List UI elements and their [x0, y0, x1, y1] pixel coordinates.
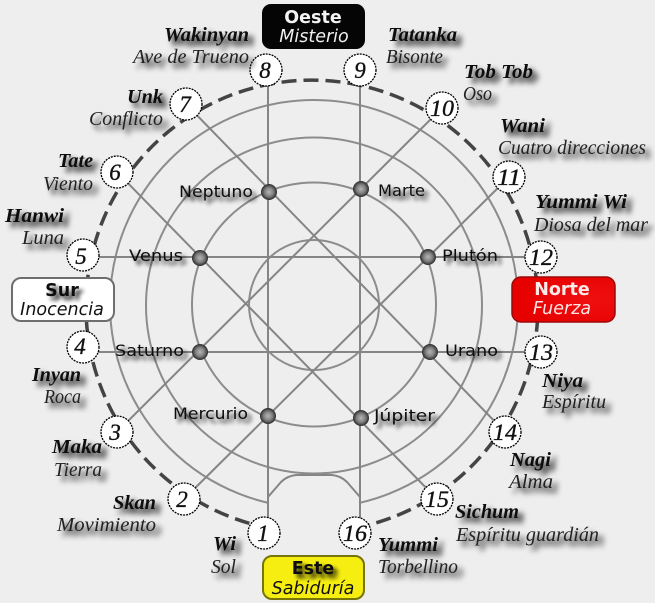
label: Nagi / Alma: [507, 449, 553, 493]
label: Wani / Cuatro direcciones: Cuatro direcciones: [498, 137, 646, 159]
direction box: Sur / Inocencia: [12, 278, 114, 321]
planet: Mercurio: Mercurio: [173, 404, 248, 423]
label: Tatanka / Bisonte: Bisonte: [386, 46, 443, 68]
planet: Saturno: [115, 341, 208, 360]
label: Unk / Conflicto: [89, 86, 163, 130]
planet: Saturno: Saturno: [115, 341, 184, 360]
label: Skan / Movimiento: [56, 492, 156, 536]
label: Wani / Cuatro direcciones: Wani: [500, 115, 545, 137]
number 16: [339, 517, 371, 549]
planet: Mercurio: [173, 404, 276, 424]
label: Yummi / Torbellino: [378, 534, 458, 578]
number 10: [426, 92, 458, 124]
star chords connecting numbered points: [83, 70, 541, 533]
label: Tatanka / Bisonte: Tatanka: [388, 24, 457, 46]
planet: Marte: [353, 181, 425, 200]
number 11: 11: [497, 165, 521, 190]
planet: Urano: [422, 341, 498, 360]
label: Tate / Viento: Tate: [58, 150, 93, 172]
number 2: [168, 483, 200, 515]
direction box: Este / Sabiduría: Este: [292, 559, 334, 579]
planet: Venus: Venus: [129, 246, 183, 265]
number 1: [248, 517, 280, 549]
label: Nagi / Alma: Alma: [507, 471, 553, 493]
number 6: [101, 156, 133, 188]
label: Inyan / Roca: [31, 364, 81, 408]
number 14: 14: [493, 420, 517, 445]
label: Yummi / Torbellino: Yummi: [378, 534, 438, 556]
direction box: Norte / Fuerza: Fuerza: [533, 299, 591, 319]
label: Skan / Movimiento: Movimiento: [56, 514, 156, 536]
number 6: 6: [109, 160, 121, 185]
label: Yummi Wi / Diosa del mar: Diosa del mar: [533, 214, 648, 236]
label: Sichum / Espíritu guardián: Sichum: [455, 501, 519, 523]
number 4: 4: [74, 334, 86, 359]
number 13: [525, 336, 557, 368]
number 5: [67, 239, 99, 271]
number 13: 13: [529, 340, 553, 365]
number 15: 15: [425, 487, 449, 512]
number 12: 12: [529, 245, 553, 270]
label: Yummi Wi / Diosa del mar: Yummi Wi: [535, 191, 627, 213]
label: Tatanka / Bisonte: [386, 24, 457, 68]
direction box: Oeste / Misterio: Misterio: [279, 27, 349, 47]
planet: Marte: Marte: [378, 181, 425, 200]
direction box: Sur / Inocencia: Sur: [45, 281, 79, 301]
number 3: 3: [108, 420, 121, 445]
label: Sichum / Espíritu guardián: Espíritu guardián: [455, 524, 599, 546]
number 16: 16: [343, 521, 368, 546]
number 7: 7: [179, 92, 192, 117]
planet: Plutón: [420, 246, 498, 265]
label: Unk / Conflicto: Unk: [127, 86, 163, 108]
planet: Venus: [129, 246, 208, 266]
direction box: Oeste / Misterio: [262, 4, 365, 49]
number 4: [67, 331, 99, 363]
label: Inyan / Roca: Roca: [43, 386, 81, 408]
label: Hanwi / Luna: Luna: [21, 227, 64, 249]
label: Tate / Viento: Viento: [43, 173, 93, 195]
number 9: [344, 54, 376, 86]
number 8: 8: [259, 58, 271, 83]
number 5: 5: [75, 244, 87, 269]
label: Wi / Sol: Wi: [213, 533, 236, 555]
direction box: Sur / Inocencia: Inocencia: [20, 300, 104, 320]
label: Tob Tob / Oso: [463, 61, 533, 105]
label: Skan / Movimiento: Skan: [113, 492, 156, 514]
label: Tate / Viento: [43, 150, 93, 195]
number 8: [250, 54, 282, 86]
number 14: [489, 416, 521, 448]
label: Hanwi / Luna: Hanwi: [4, 205, 64, 227]
lower arch opening: [268, 475, 360, 540]
planet: Júpiter: [353, 406, 435, 426]
label: Maka / Tierra: Maka: [51, 436, 102, 458]
number 1: 1: [257, 521, 269, 546]
label: Wi / Sol: Sol: [211, 556, 236, 578]
label: Sichum / Espíritu guardián: [455, 501, 599, 546]
label: Wani / Cuatro direcciones: [498, 115, 646, 159]
direction box: Oeste / Misterio: Oeste: [284, 8, 342, 28]
label: Unk / Conflicto: Conflicto: [89, 108, 163, 130]
number 2: 2: [176, 487, 188, 512]
planet: Neptuno: Neptuno: [179, 182, 253, 201]
direction box: Este / Sabiduría: [263, 556, 364, 599]
concentric rings: [110, 100, 518, 508]
label: Wakinyan / Ave de Trueno: [131, 24, 249, 68]
label: Nagi / Alma: Nagi: [509, 449, 551, 471]
direction box: Norte / Fuerza: Norte: [534, 280, 590, 300]
label: Inyan / Roca: Inyan: [31, 364, 81, 386]
label: Niya / Espíritu: [541, 370, 606, 413]
planet: Neptuno: [179, 182, 277, 201]
label: Hanwi / Luna: [4, 205, 64, 249]
number 7: [170, 88, 202, 120]
label: Maka / Tierra: Tierra: [54, 459, 102, 481]
number 15: [421, 483, 453, 515]
label: Maka / Tierra: [51, 436, 102, 481]
label: Yummi Wi / Diosa del mar: [533, 191, 648, 236]
number 11: [493, 161, 525, 193]
label: Tob Tob / Oso: Oso: [463, 83, 492, 105]
planet: Júpiter: Júpiter: [373, 406, 435, 425]
number 10: 10: [430, 96, 455, 121]
label: Tob Tob / Oso: Tob Tob: [464, 61, 533, 83]
label: Yummi / Torbellino: Torbellino: [378, 556, 458, 578]
label: Wakinyan / Ave de Trueno: Wakinyan: [164, 24, 249, 46]
label: Niya / Espíritu: Espíritu: [541, 391, 606, 413]
label: Niya / Espíritu: Niya: [541, 370, 583, 392]
number 9: 9: [354, 58, 366, 83]
label: Wakinyan / Ave de Trueno: Ave de Trueno: [131, 46, 249, 68]
direction box: Este / Sabiduría: Sabiduría: [272, 579, 354, 599]
number 12: [525, 241, 557, 273]
planet: Plutón: Plutón: [442, 246, 498, 265]
number 3: [101, 416, 133, 448]
label: Wi / Sol: [211, 533, 236, 578]
dashed outer ring: [86, 80, 538, 528]
planet: Urano: Urano: [445, 341, 498, 360]
direction box: Norte / Fuerza: [512, 277, 615, 322]
